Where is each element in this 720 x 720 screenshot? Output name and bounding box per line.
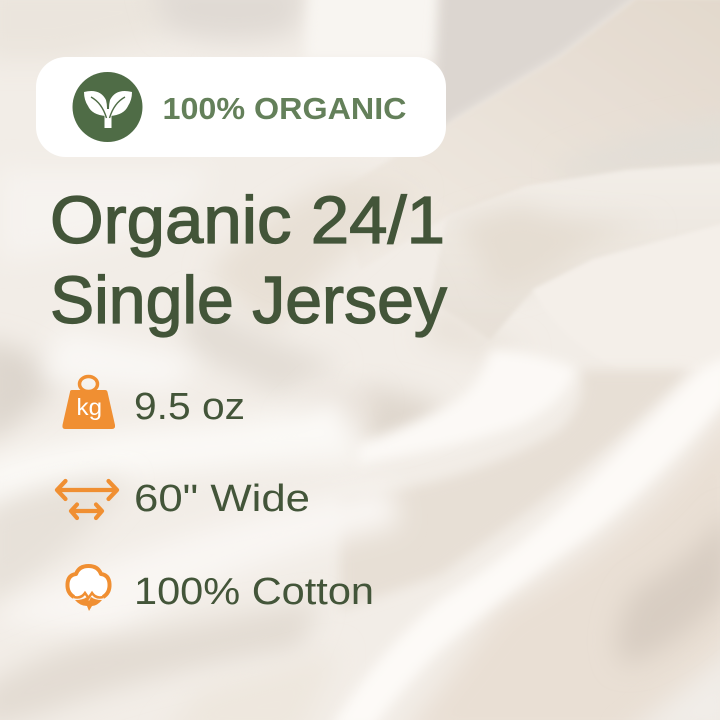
badge label: 100% ORGANIC — [162, 91, 406, 126]
icon: kg weight: kg — [76, 394, 102, 420]
weight label: 9.5 oz — [134, 386, 245, 428]
left column soft bands — [0, 340, 60, 445]
spec: width — [57, 478, 310, 520]
icon: kg weight — [62, 376, 115, 429]
spec: fibre — [67, 566, 374, 613]
spec: weight — [62, 376, 245, 429]
badge background pill — [36, 57, 446, 157]
icon: leaf sprout in green circle — [72, 72, 142, 142]
lower right: shaded hollow — [340, 370, 690, 610]
title line 2: Single Jersey — [50, 263, 447, 338]
diagonal shade through the title — [207, 180, 420, 330]
top zone — [0, 0, 170, 60]
icon: cotton boll — [67, 566, 110, 611]
icon: width arrows — [57, 481, 117, 518]
below the long ridge — [400, 400, 720, 720]
bright ridges — [330, 355, 720, 720]
title line 1: Organic 24/1 — [50, 183, 445, 258]
title — [50, 183, 447, 338]
middle right fold — [430, 163, 720, 340]
upper right broad fold — [340, 0, 720, 270]
width label: 60" Wide — [134, 478, 310, 520]
fibre label: 100% Cotton — [134, 571, 374, 613]
badge: 100% organic — [36, 57, 446, 157]
